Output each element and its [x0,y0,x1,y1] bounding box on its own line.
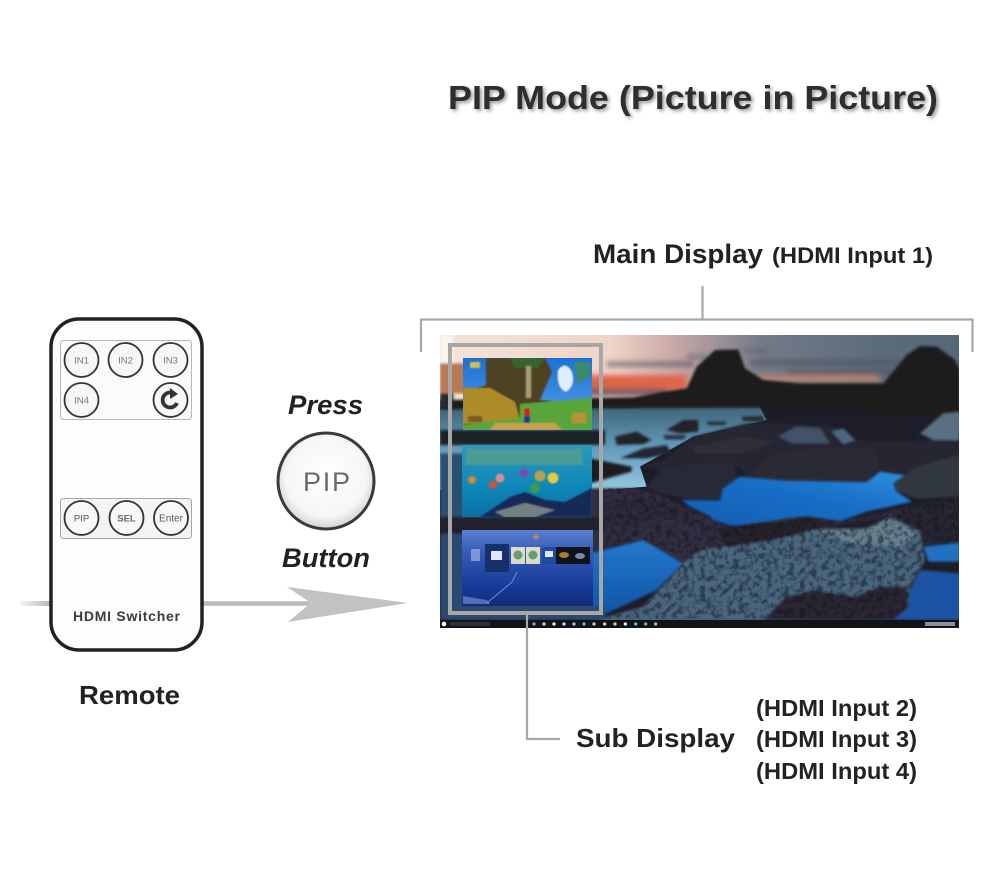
press label: Press [288,390,363,420]
sub display input labels: (HDMI Input 2) [756,695,917,721]
title: PIP Mode (Picture in Picture) [450,82,940,119]
input button panel: IN3 [163,356,178,366]
main display bracket [421,286,972,352]
sub display input labels [756,695,917,784]
lower left pool [590,540,683,615]
sub display input labels: (HDMI Input 3) [756,726,917,752]
remote label: Remote [79,680,180,710]
function button panel [60,498,192,538]
sub display frame [450,345,601,613]
input button panel [60,340,192,420]
PIP button icon: PIP [303,467,350,497]
headlands [440,346,960,415]
photo base [440,406,959,620]
remote brand label: HDMI Switcher [73,608,181,624]
input button panel: IN2 [118,356,133,366]
rock mottling [600,487,960,620]
remote body [51,319,202,650]
function button panel: SEL [117,514,136,524]
thumbnail: underwater game [462,445,592,517]
main blue pool [682,472,912,527]
main display photo [440,335,960,628]
main display input label: (HDMI Input 1) [772,243,933,268]
arrow: remote to display [20,587,408,622]
main display label: Main Display [593,239,763,269]
PIP button icon [278,433,374,529]
lower right pools [867,543,960,620]
large pale rock [590,517,925,622]
function button panel: PIP [74,514,89,524]
upper water [440,407,767,490]
sky [440,335,960,407]
taskbar [440,620,960,628]
central rock masses [642,412,960,500]
function button panel: Enter [159,514,184,524]
thumbnail: console menu [462,530,593,606]
thumbnail: platform game [463,358,592,430]
rocks behind the frame [440,335,605,620]
input button panel: IN1 [74,356,89,366]
title: PIP Mode (Picture in Picture) [448,80,938,117]
sub display thumbnails [462,358,593,606]
rocks in the upper water [590,416,763,483]
button label: Button [282,543,370,573]
remote control [51,319,202,650]
sub display leader line [527,614,560,739]
sub display label: Sub Display [576,723,736,753]
sub display input labels: (HDMI Input 4) [756,758,917,784]
lower rock band [590,488,960,567]
input button panel: IN4 [74,396,89,406]
